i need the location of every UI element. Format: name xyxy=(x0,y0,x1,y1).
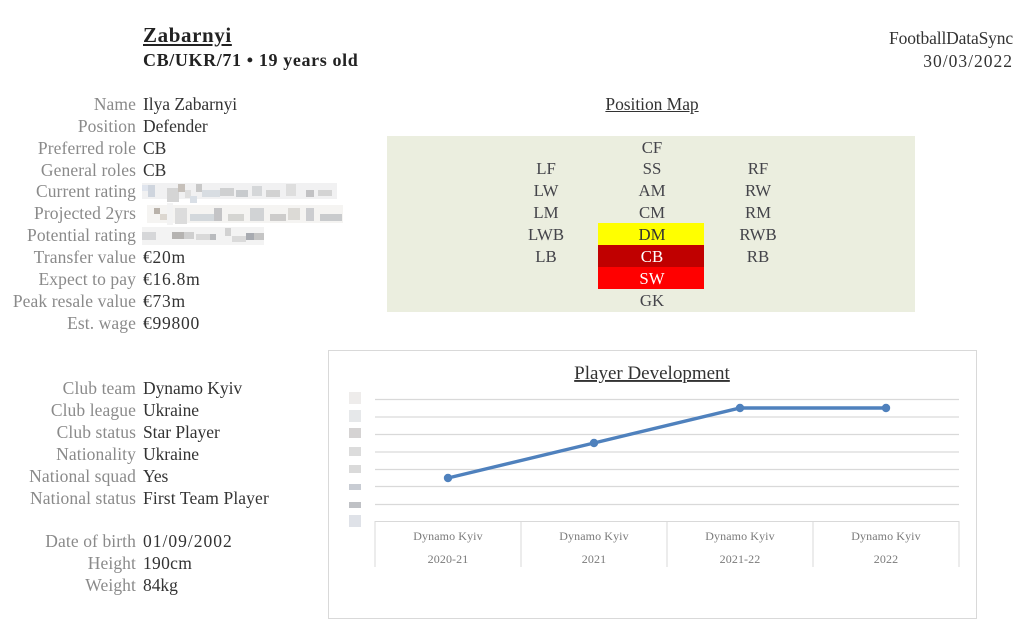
source and date: 30/03/2022 xyxy=(923,51,1013,71)
chart title: Player Development xyxy=(574,363,731,384)
panel: club and personal details xyxy=(29,378,269,595)
position labels: LW xyxy=(534,181,558,200)
panel: club and personal details: Height xyxy=(88,553,136,573)
panel: player attributes: Defender xyxy=(143,116,208,136)
panel: club and personal details: 84kg xyxy=(143,575,178,595)
x-axis category table xyxy=(375,521,959,567)
panel: player attributes: Est. wage xyxy=(67,313,136,333)
position labels: RB xyxy=(747,247,769,266)
position labels: LF xyxy=(536,159,556,178)
x-axis category table: 2020-21 xyxy=(428,552,468,566)
panel: player attributes: €16.8m xyxy=(143,269,200,289)
panel: club and personal details: National status xyxy=(30,488,136,508)
position labels: GK xyxy=(640,291,664,310)
position labels: RM xyxy=(745,203,771,222)
position labels: RWB xyxy=(739,225,777,244)
panel: club and personal details: 01/09/2002 xyxy=(143,531,233,551)
position labels: LM xyxy=(533,203,559,222)
panel: player attributes: CB xyxy=(143,160,166,180)
panel: player attributes xyxy=(13,94,237,333)
x-axis category table: 2021 xyxy=(582,552,606,566)
panel: player attributes: Name xyxy=(94,94,136,114)
heading: position map: Position Map xyxy=(605,94,699,114)
panel: club and personal details: 190cm xyxy=(143,553,192,573)
position labels: CF xyxy=(642,138,662,157)
position labels: LB xyxy=(535,247,557,266)
panel: club and personal details: First Team Player xyxy=(143,488,269,508)
panel: club and personal details: Date of birth xyxy=(45,531,136,551)
x-axis category table: Dynamo Kyiv xyxy=(559,529,629,543)
position labels: AM xyxy=(638,181,666,200)
highlighted position cells xyxy=(598,223,704,289)
position labels: RF xyxy=(748,159,768,178)
gridlines xyxy=(375,400,959,504)
panel: player attributes: Projected 2yrs xyxy=(34,203,136,223)
position labels: SW xyxy=(639,269,665,288)
source and date xyxy=(889,28,1013,71)
position labels: CB xyxy=(641,247,663,266)
panel: club and personal details: Star Player xyxy=(143,422,220,442)
panel: player attributes: Current rating xyxy=(36,181,136,201)
panel: club and personal details: Nationality xyxy=(56,444,136,464)
line series xyxy=(444,404,890,482)
source and date: FootballDataSync xyxy=(889,28,1013,48)
title: player name: Zabarnyi xyxy=(143,23,232,47)
redacted y-axis labels xyxy=(349,392,361,527)
x-axis category table: 2021-22 xyxy=(720,552,760,566)
position labels: RW xyxy=(745,181,771,200)
position labels xyxy=(528,138,777,310)
panel: club and personal details: Club status xyxy=(57,422,136,442)
panel: club and personal details: National squad xyxy=(29,466,136,486)
x-axis category table: 2022 xyxy=(874,552,898,566)
panel: club and personal details: Ukraine xyxy=(143,400,199,420)
x-axis category table: Dynamo Kyiv xyxy=(705,529,775,543)
panel: player attributes: Peak resale value xyxy=(13,291,136,311)
panel: club and personal details: Dynamo Kyiv xyxy=(143,378,242,398)
panel: player attributes: €99800 xyxy=(143,313,200,333)
panel: player attributes: Expect to pay xyxy=(38,269,136,289)
panel: club and personal details: Yes xyxy=(143,466,168,486)
panel: player attributes: €73m xyxy=(143,291,186,311)
panel: player attributes: CB xyxy=(143,138,166,158)
panel: player attributes: Potential rating xyxy=(27,225,136,245)
panel: player attributes: Transfer value xyxy=(34,247,136,267)
subtitle: position, nation, age: CB/UKR/71 • 19 years old xyxy=(143,50,358,70)
panel: player attributes: Position xyxy=(78,116,136,136)
panel: club and personal details: Club league xyxy=(51,400,136,420)
panel: club and personal details: Ukraine xyxy=(143,444,199,464)
panel: player attributes: General roles xyxy=(41,160,136,180)
panel: club and personal details: Club team xyxy=(63,378,136,398)
x-axis category table: Dynamo Kyiv xyxy=(851,529,921,543)
panel: player attributes: Ilya Zabarnyi xyxy=(143,94,237,114)
position labels: SS xyxy=(643,159,661,178)
panel: club and personal details: Weight xyxy=(85,575,136,595)
panel: player attributes: Preferred role xyxy=(38,138,136,158)
position labels: CM xyxy=(639,203,665,222)
position labels: DM xyxy=(638,225,666,244)
x-axis category table: Dynamo Kyiv xyxy=(413,529,483,543)
position labels: LWB xyxy=(528,225,564,244)
panel: player attributes: €20m xyxy=(143,247,186,267)
panel: position map xyxy=(387,136,915,312)
